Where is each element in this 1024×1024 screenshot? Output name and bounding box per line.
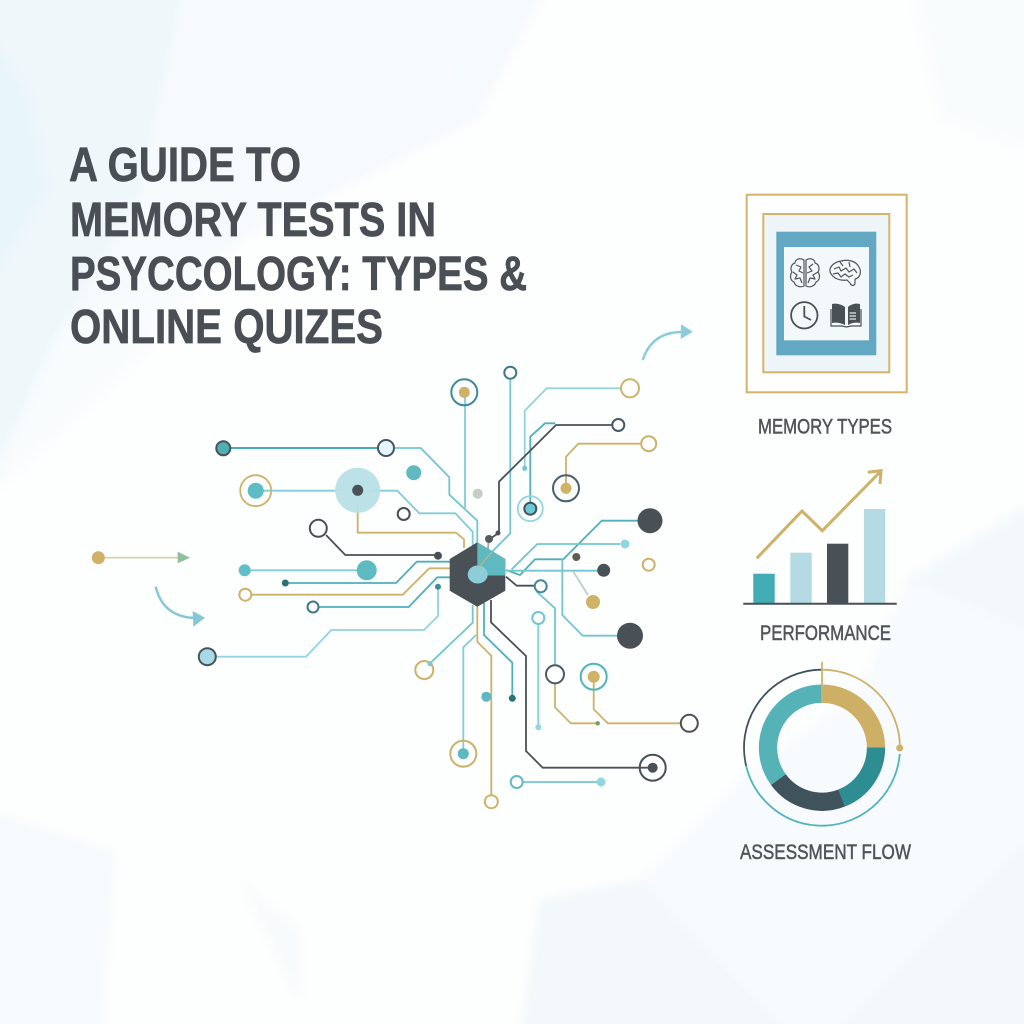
circuit network diagram xyxy=(199,367,698,808)
icon: clock xyxy=(791,302,818,328)
bar chart xyxy=(743,509,897,604)
outer gold frame xyxy=(747,195,907,392)
circuit traces: left side xyxy=(217,448,477,657)
label: performance: PERFORMANCE xyxy=(760,622,891,645)
title: A GUIDE TO xyxy=(69,139,301,192)
label: assessment flow: ASSESSMENT FLOW xyxy=(740,841,911,864)
arrow: curved input arrow xyxy=(156,587,205,627)
trend arrow xyxy=(757,471,881,558)
panel: assessment flow xyxy=(728,654,916,864)
title: MEMORY TESTS IN xyxy=(70,194,436,247)
node group: right xyxy=(535,508,698,732)
icon: brain top view xyxy=(791,259,819,287)
icon: brain side view xyxy=(830,260,860,285)
arrow: curved output arrow xyxy=(643,324,693,360)
blue card xyxy=(776,232,876,355)
title: ONLINE QUIZES xyxy=(70,301,383,354)
central hexagon hub xyxy=(450,542,505,607)
node group: top xyxy=(451,367,656,543)
label: memory types: MEMORY TYPES xyxy=(758,416,892,438)
node group: left xyxy=(199,440,483,665)
circuit traces: bottom xyxy=(430,600,648,795)
white card interior xyxy=(784,247,869,340)
donut chart xyxy=(747,672,897,823)
icon: open book xyxy=(831,304,861,327)
title xyxy=(69,139,527,354)
outer progress ring xyxy=(728,654,916,841)
node group: bottom xyxy=(415,612,666,808)
panel: memory types xyxy=(747,195,907,438)
panel: performance xyxy=(743,471,897,645)
inner gold frame xyxy=(763,214,889,372)
circuit traces: right side xyxy=(506,521,681,723)
arrow: straight input arrow xyxy=(92,551,190,564)
title: PSYCCOLOGY: TYPES & xyxy=(70,248,527,301)
circuit traces: top xyxy=(465,373,641,567)
